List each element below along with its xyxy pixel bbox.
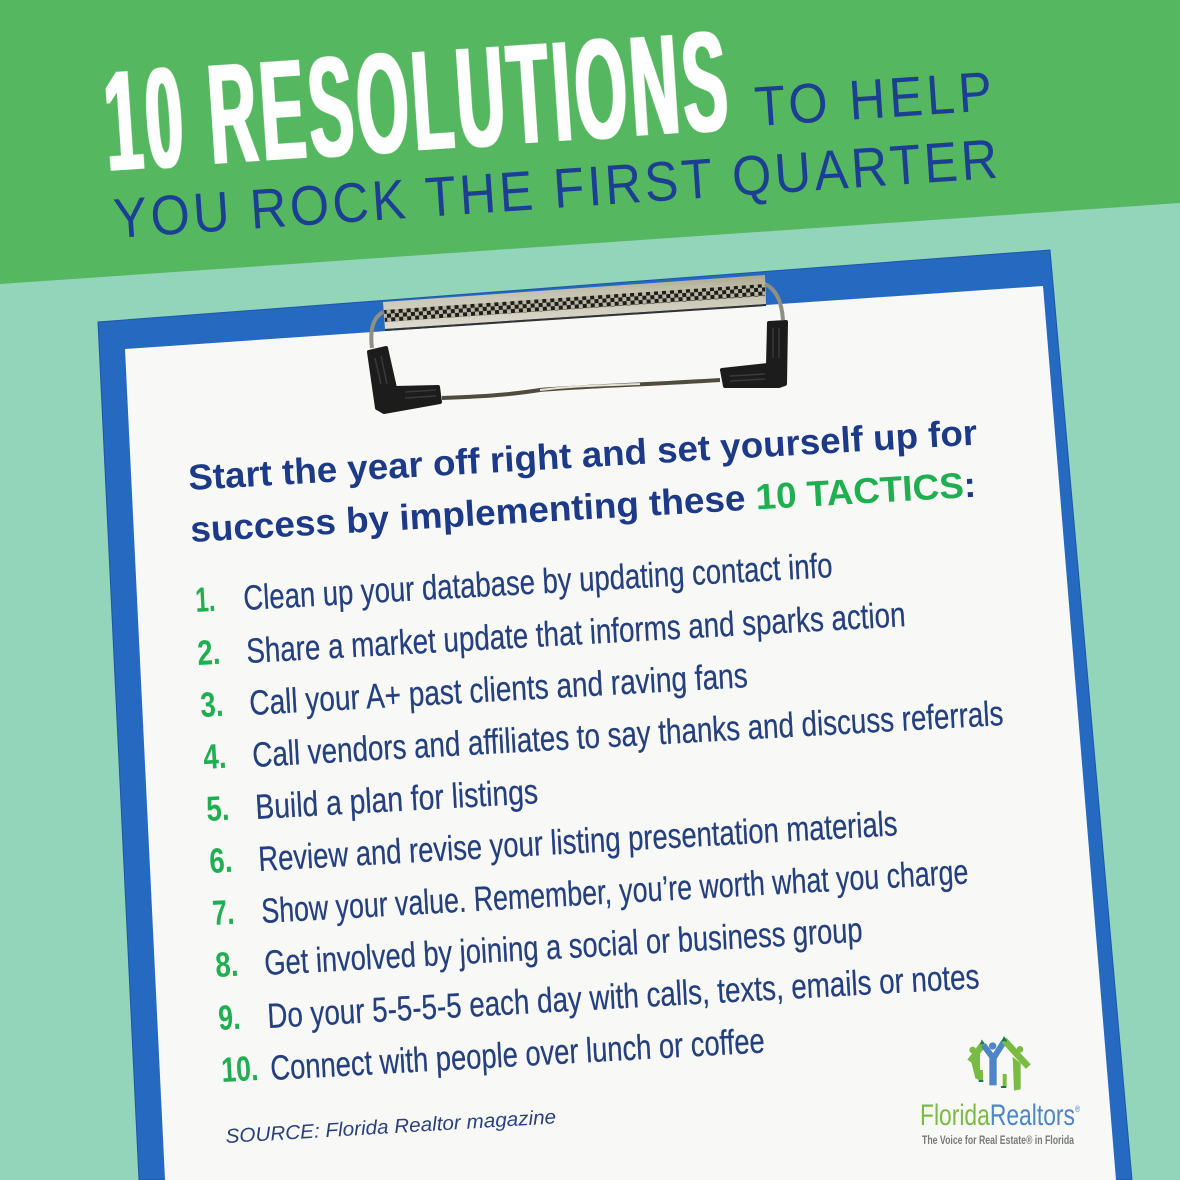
intro line 1: Start the year off right and set yourself up for — [187, 412, 978, 498]
item 3 — [199, 656, 749, 725]
item 7: Show your value. Remember, you’re worth what you charge — [260, 853, 969, 931]
item 8: 8. — [214, 945, 239, 985]
subtitle: to help: TO HELP — [753, 61, 994, 139]
clip bar — [383, 275, 766, 331]
item 10: Connect with people over lunch or coffee — [269, 1021, 766, 1088]
logo wordmark: ® — [1075, 1104, 1080, 1114]
item 9: 9. — [217, 998, 241, 1038]
item 2: Share a market update that informs and sparks action — [245, 595, 906, 671]
item 6 — [208, 804, 898, 881]
tactics list — [194, 546, 1004, 1090]
clip wire — [371, 284, 783, 398]
item 8: Get involved by joining a social or business group — [263, 911, 864, 983]
icon: houses and people — [969, 1036, 1028, 1091]
item 1 — [194, 546, 834, 620]
clipboard board — [98, 250, 1132, 1180]
clip right handle — [722, 322, 786, 386]
item 7 — [211, 853, 969, 933]
item 4: 4. — [202, 737, 227, 777]
item 9: Do your 5-5-5-5 each day with calls, texts, emails or notes — [266, 957, 980, 1036]
intro heading — [187, 412, 978, 550]
item 3: 3. — [199, 685, 224, 725]
item 1: 1. — [194, 580, 216, 620]
item 3: Call your A+ past clients and raving fans — [248, 656, 749, 723]
item 7: 7. — [211, 893, 235, 933]
item 5 — [205, 772, 539, 829]
item 2: 2. — [196, 633, 221, 673]
clip left handle — [369, 348, 440, 412]
subtitle: you rock the first quarter: YOU ROCK THE FIRST QUARTER — [112, 128, 999, 251]
item 5: Build a plan for listings — [254, 772, 539, 827]
title: 10 Resolutions: 10 RESOLUTIONS — [99, 0, 732, 202]
logo wordmark: FloridaRealtors — [920, 1099, 1102, 1132]
intro line 2: success by implementing these 10 TACTICS: — [189, 464, 977, 550]
banner: green header — [0, 0, 1180, 284]
paper sheet — [125, 286, 1116, 1180]
item 5: 5. — [205, 789, 230, 829]
item 9 — [217, 957, 980, 1038]
logo: Florida Realtors — [920, 1036, 1080, 1147]
item 1: Clean up your database by updating contact info — [242, 546, 834, 618]
item 10: 10. — [220, 1049, 259, 1090]
item 6: Review and revise your listing presentation materials — [257, 804, 898, 879]
source note: SOURCE: Florida Realtor magazine — [225, 1106, 557, 1148]
item 4 — [202, 694, 1004, 777]
item 4: Call vendors and affiliates to say thanks and discuss referrals — [251, 694, 1004, 775]
item 6: 6. — [208, 841, 233, 881]
item 8 — [214, 911, 864, 985]
logo tagline: The Voice for Real Estate® in Florida — [922, 1133, 1074, 1147]
item 10 — [220, 1021, 766, 1090]
metal clip — [369, 275, 786, 412]
item 2 — [196, 595, 906, 673]
